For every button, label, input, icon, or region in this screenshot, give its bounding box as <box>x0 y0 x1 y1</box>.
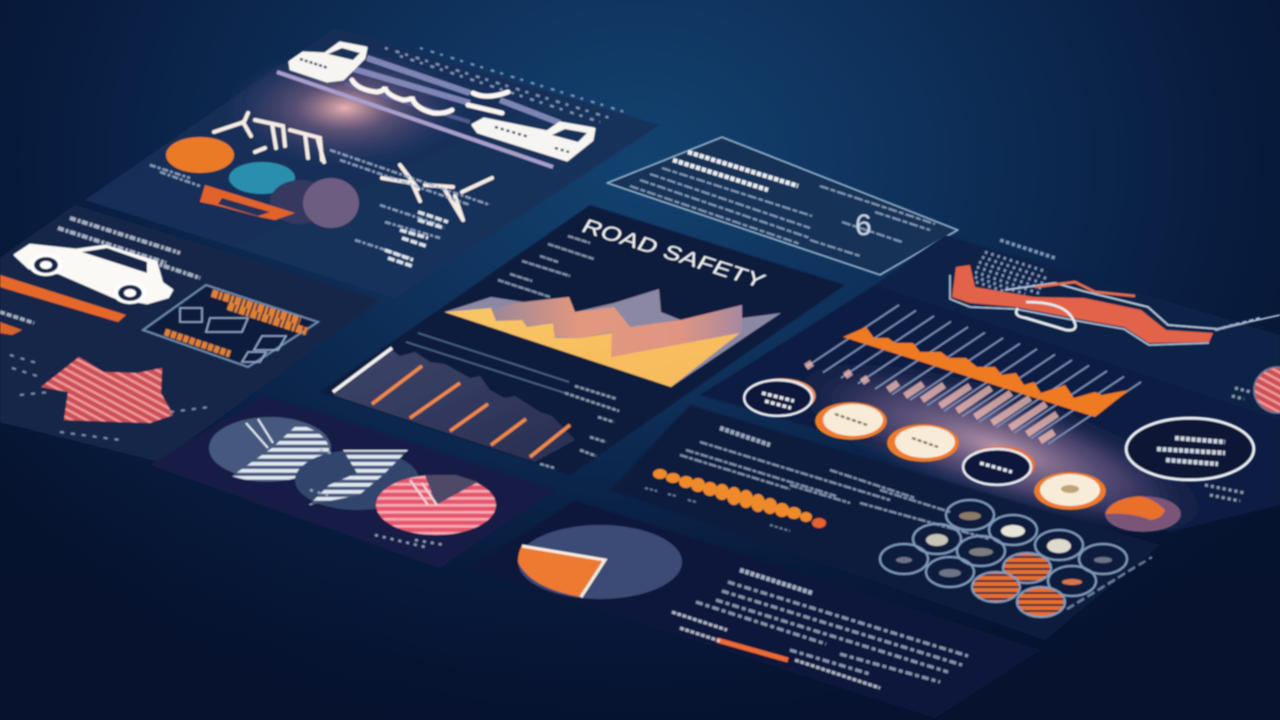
figures right <box>382 165 492 220</box>
text heading <box>740 570 812 593</box>
side text <box>0 312 34 323</box>
outlined table <box>143 285 318 367</box>
circle cream 2 <box>815 402 887 440</box>
edge labels <box>1205 388 1251 501</box>
lower chart guide lines <box>406 333 569 393</box>
text heading <box>673 152 798 190</box>
circle outline 4 <box>963 446 1035 485</box>
panel: car panel <box>0 205 380 462</box>
pie 2 <box>295 450 419 510</box>
text heading <box>58 218 200 278</box>
spike lines <box>806 305 1141 444</box>
circle cream 5 <box>1034 472 1106 510</box>
text heading <box>1000 240 1055 258</box>
axis labels <box>645 488 790 531</box>
figures row <box>214 113 324 162</box>
orange bar <box>0 275 126 322</box>
circle orange 6 <box>1105 496 1181 532</box>
icon: car <box>15 245 172 304</box>
panel: bottom pie and text <box>470 500 1040 718</box>
glow band <box>778 326 1222 570</box>
panel: top transport panel <box>85 28 660 298</box>
circle cream 3 <box>887 424 959 462</box>
white curved marks <box>352 80 508 113</box>
large pie <box>518 525 682 599</box>
table rows <box>150 150 490 258</box>
orange rule <box>717 640 788 660</box>
orange bar strip <box>653 469 826 528</box>
right labels <box>540 386 619 468</box>
blob: teal <box>229 162 295 194</box>
edge stripe circle <box>1254 367 1280 413</box>
speckled text rows <box>385 48 625 122</box>
orange chart <box>843 327 1129 417</box>
panel: road safety centre panel <box>320 205 845 475</box>
panel: middle text and grid <box>610 405 1160 640</box>
pie 3 <box>376 475 496 535</box>
blob: orange <box>166 137 234 173</box>
icon: truck right <box>473 119 594 160</box>
area chart <box>444 289 781 387</box>
big ring <box>1126 418 1254 480</box>
pie 1 <box>209 417 331 482</box>
small number marks <box>385 212 448 266</box>
striped road lines <box>347 58 560 123</box>
circle outline 1 <box>744 378 816 416</box>
lower bar chart <box>333 348 575 462</box>
scattered dots <box>10 355 210 440</box>
orange bracket shape <box>200 185 295 220</box>
white loop <box>1016 302 1075 330</box>
blob: mauve <box>270 178 359 228</box>
red zigzag chart <box>950 265 1280 345</box>
grid side labels <box>1067 557 1152 609</box>
red star chart <box>41 357 173 423</box>
grid of circles <box>880 500 1127 617</box>
icon: truck left <box>290 43 366 81</box>
text rows <box>498 236 594 297</box>
scattered labels <box>310 450 445 547</box>
panel: top right text panel <box>607 137 958 275</box>
text heading <box>720 428 770 445</box>
title: ROAD SAFETY <box>577 216 770 293</box>
numeral: 6 <box>855 209 872 242</box>
panel: pie charts <box>150 395 555 568</box>
text rows <box>630 168 935 256</box>
panel: right upper panel <box>700 235 1280 570</box>
text rows <box>696 582 968 682</box>
circles row <box>744 378 1254 532</box>
pink bars <box>806 363 1057 441</box>
footer notes <box>672 612 880 688</box>
text rows <box>680 442 990 539</box>
pink glow <box>225 50 465 166</box>
dot grid <box>975 252 1048 294</box>
